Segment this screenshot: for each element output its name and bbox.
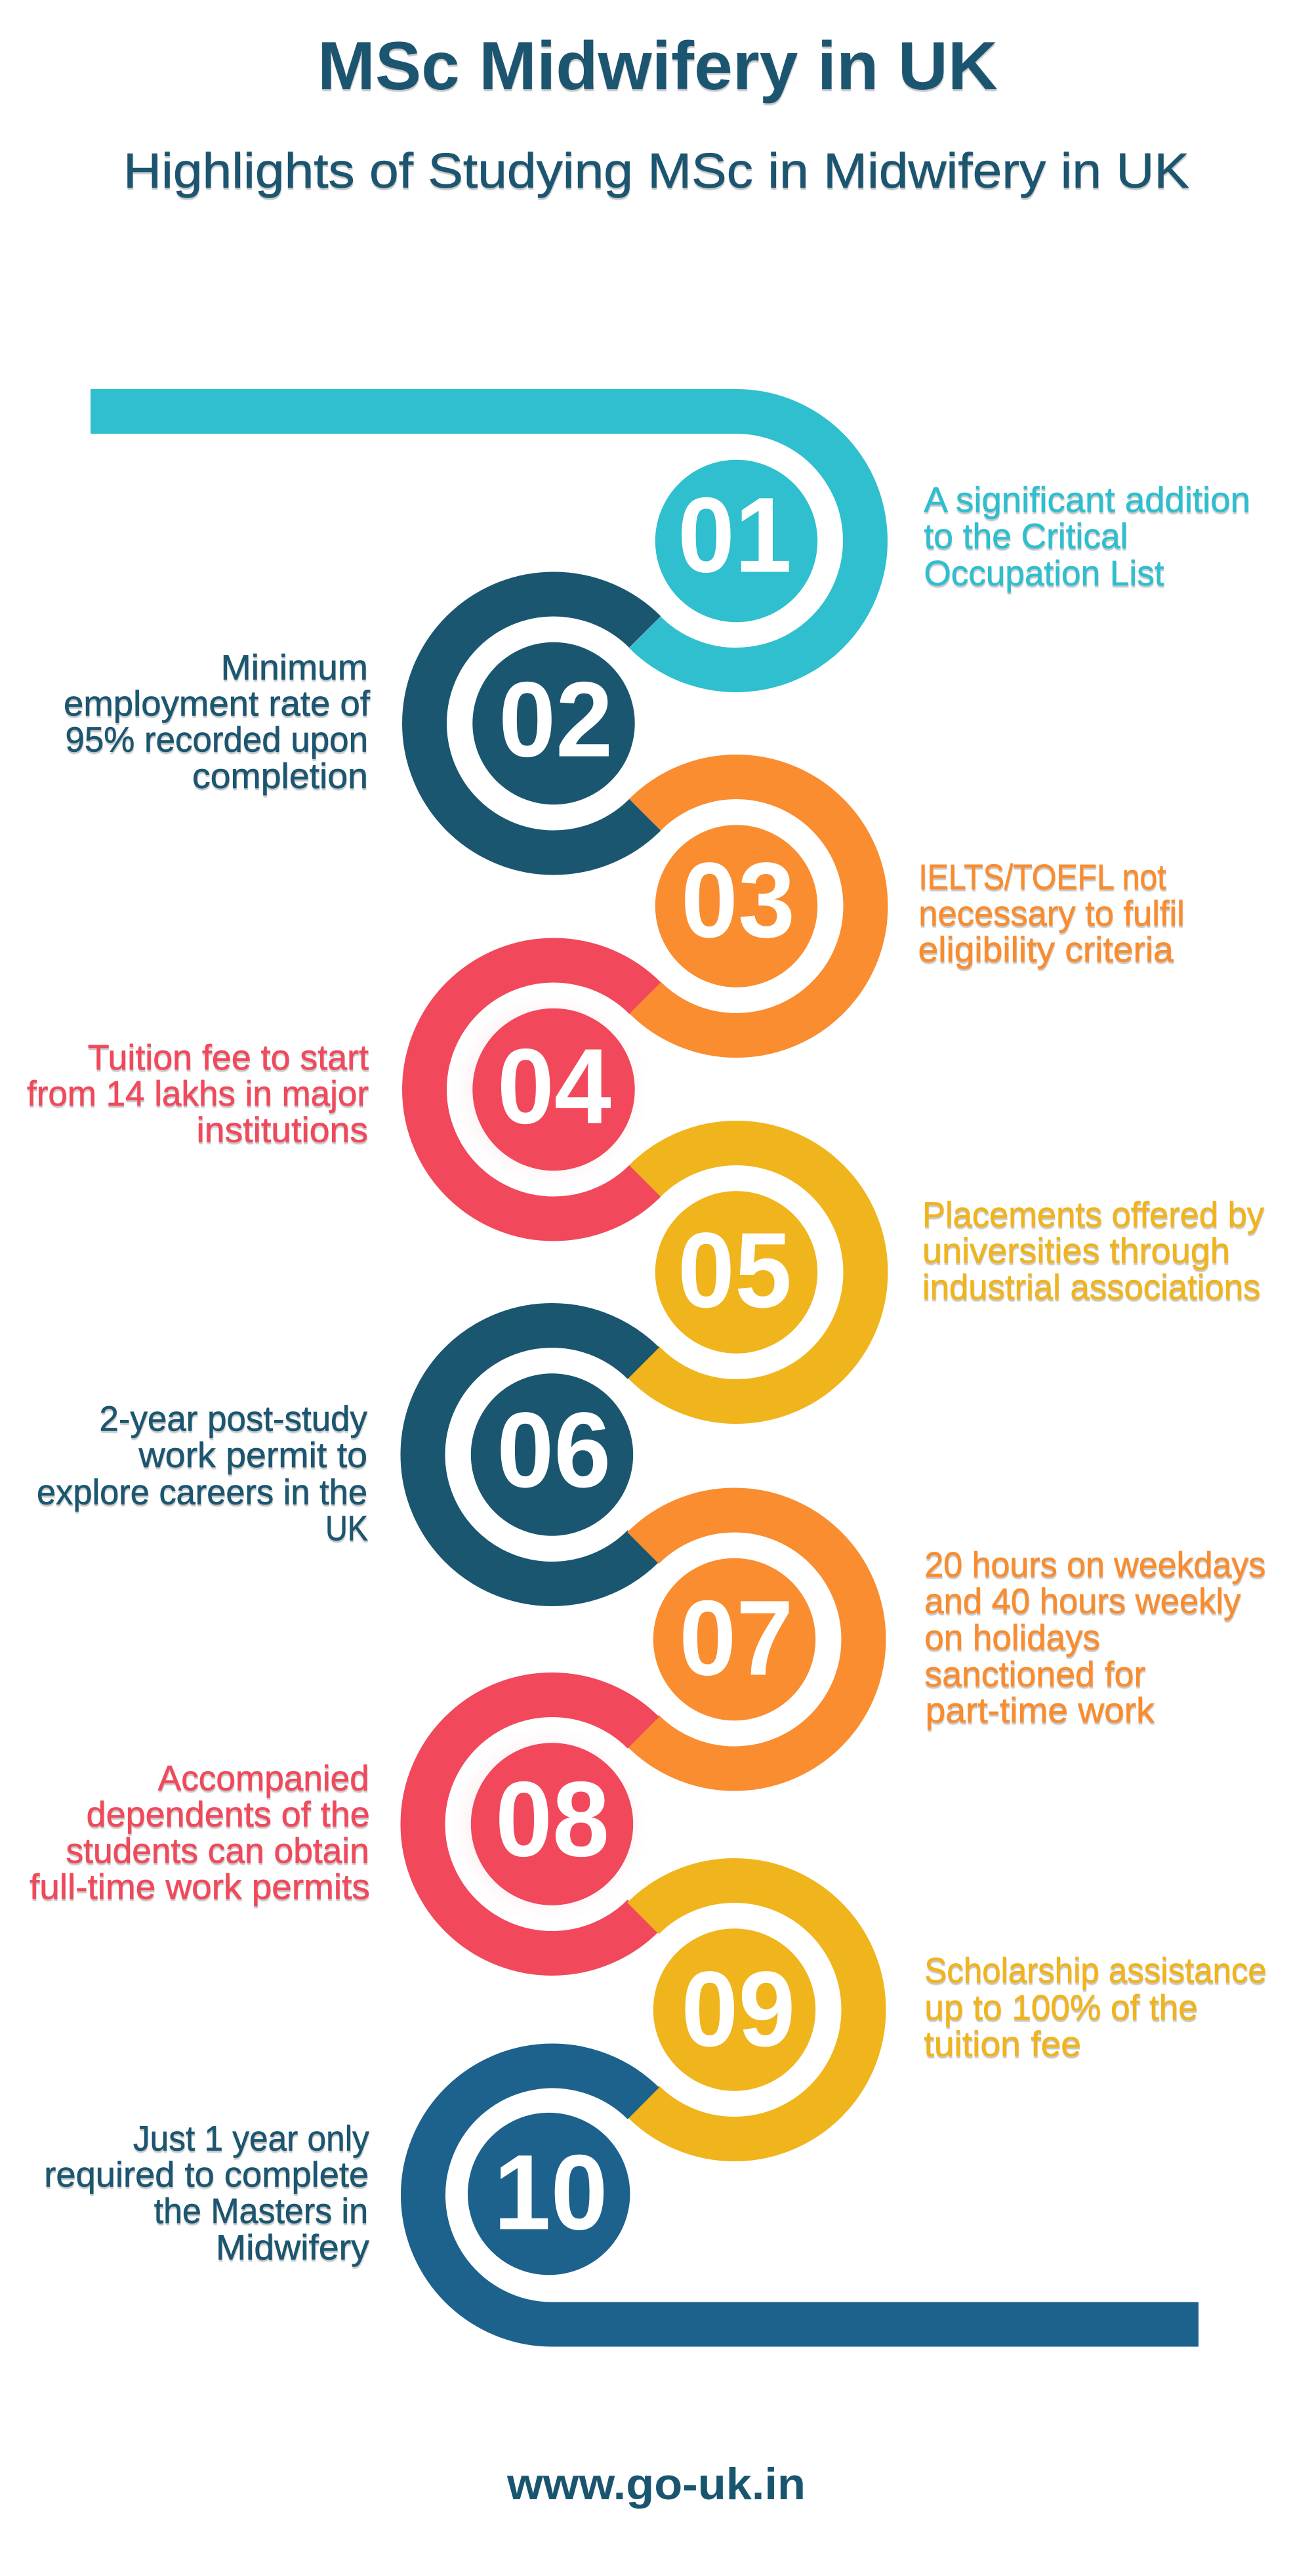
ring 01	[91, 411, 865, 670]
text 10	[44, 2119, 369, 2267]
website url: www.go-uk.in	[506, 2459, 806, 2509]
text 07: on holidays	[924, 1618, 1100, 1657]
disk 08	[471, 1743, 633, 1905]
ring 02	[424, 594, 645, 853]
text 05: Placements offered by	[922, 1195, 1264, 1235]
text 07: 20 hours on weekdays	[924, 1545, 1265, 1585]
disk 01	[655, 460, 817, 622]
text 06: work permit to	[138, 1436, 367, 1475]
step 01: teal ring with top band and number	[91, 411, 865, 670]
text 06: UK	[325, 1508, 368, 1548]
text 05: industrial associations	[922, 1268, 1260, 1307]
disk 05	[655, 1191, 817, 1354]
text 03	[918, 858, 1185, 969]
text 02: completion	[192, 757, 368, 796]
text 06: explore careers in the	[37, 1472, 367, 1512]
ring 06	[422, 1325, 644, 1584]
text 04: from 14 lakhs in major	[27, 1074, 369, 1113]
text 08: dependents of the	[87, 1795, 370, 1835]
text 09: Scholarship assistance	[924, 1951, 1267, 1990]
text 08: students can obtain	[66, 1831, 369, 1871]
number 09: 09	[681, 1949, 795, 2069]
text 10: Midwifery	[216, 2228, 369, 2267]
text 09: tuition fee	[924, 2025, 1081, 2064]
disk 04	[472, 1008, 635, 1171]
number 05: 05	[678, 1210, 792, 1330]
text 06: 2-year post-study	[100, 1400, 367, 1439]
title: MSc Midwifery in UK	[318, 28, 998, 104]
text 10: required to complete	[44, 2155, 369, 2195]
number 10: 10	[493, 2132, 607, 2252]
text 09	[924, 1951, 1267, 2064]
text 04: Tuition fee to start	[88, 1038, 369, 1077]
disk 10	[468, 2113, 630, 2275]
ring 04	[424, 961, 645, 1219]
text 08: full-time work permits	[30, 1867, 370, 1907]
text 05: universities through	[922, 1232, 1230, 1271]
text 01: Occupation List	[924, 554, 1164, 593]
text 10: the Masters in	[154, 2192, 368, 2231]
ring 07	[643, 1510, 864, 1769]
number 07: 07	[679, 1577, 793, 1698]
text 02: 95% recorded upon	[66, 720, 368, 760]
step 06: navy ring and number	[422, 1325, 644, 1584]
text 07: sanctioned for	[924, 1655, 1145, 1694]
step 09: yellow ring and number	[643, 1880, 864, 2139]
step 03: orange ring and number	[645, 777, 865, 1035]
text 03: necessary to fulfil	[918, 894, 1185, 934]
text 02: employment rate of	[64, 684, 371, 724]
step 10: blue ring with bottom band and number	[423, 2066, 1199, 2324]
text 04	[27, 1038, 369, 1150]
text 07	[924, 1545, 1265, 1730]
step 08: red ring and number	[423, 1695, 644, 1953]
text 01: A significant addition	[924, 480, 1250, 520]
text 01	[924, 480, 1250, 593]
text 09: up to 100% of the	[924, 1988, 1198, 2027]
text 05	[922, 1195, 1264, 1307]
step 04: red ring and number	[424, 961, 645, 1219]
ring 09	[643, 1880, 864, 2139]
text 03: IELTS/TOEFL not	[918, 858, 1166, 897]
text 02	[64, 648, 371, 796]
text 04: institutions	[197, 1111, 368, 1150]
text 08: Accompanied	[158, 1759, 369, 1798]
number 02: 02	[499, 659, 613, 779]
number 04: 04	[497, 1026, 611, 1146]
text 01: to the Critical	[924, 517, 1128, 556]
step 07: orange ring and number	[643, 1510, 864, 1769]
ring 03	[645, 777, 865, 1035]
subtitle: Highlights of Studying MSc in Midwifery in UK	[123, 143, 1189, 198]
step 05: yellow ring and number	[643, 1143, 865, 1402]
text 10: Just 1 year only	[133, 2119, 369, 2159]
text 07: and 40 hours weekly	[924, 1581, 1240, 1621]
text 06	[37, 1400, 368, 1548]
number 01: 01	[678, 475, 792, 594]
ring 08	[423, 1695, 644, 1953]
ring 05	[643, 1143, 865, 1402]
text 07: part-time work	[926, 1691, 1155, 1730]
disk 09	[653, 1928, 815, 2091]
text 08	[30, 1759, 370, 1907]
text 03: eligibility criteria	[918, 930, 1174, 969]
disk 02	[472, 642, 635, 804]
disk 07	[653, 1558, 815, 1720]
disk 03	[655, 825, 817, 987]
number 08: 08	[495, 1759, 609, 1879]
disk 06	[471, 1373, 633, 1536]
text 02: Minimum	[221, 648, 368, 688]
number 06: 06	[497, 1390, 611, 1510]
number 03: 03	[681, 840, 795, 960]
ring 10	[423, 2066, 1199, 2324]
step 02: navy ring and number	[424, 594, 645, 853]
